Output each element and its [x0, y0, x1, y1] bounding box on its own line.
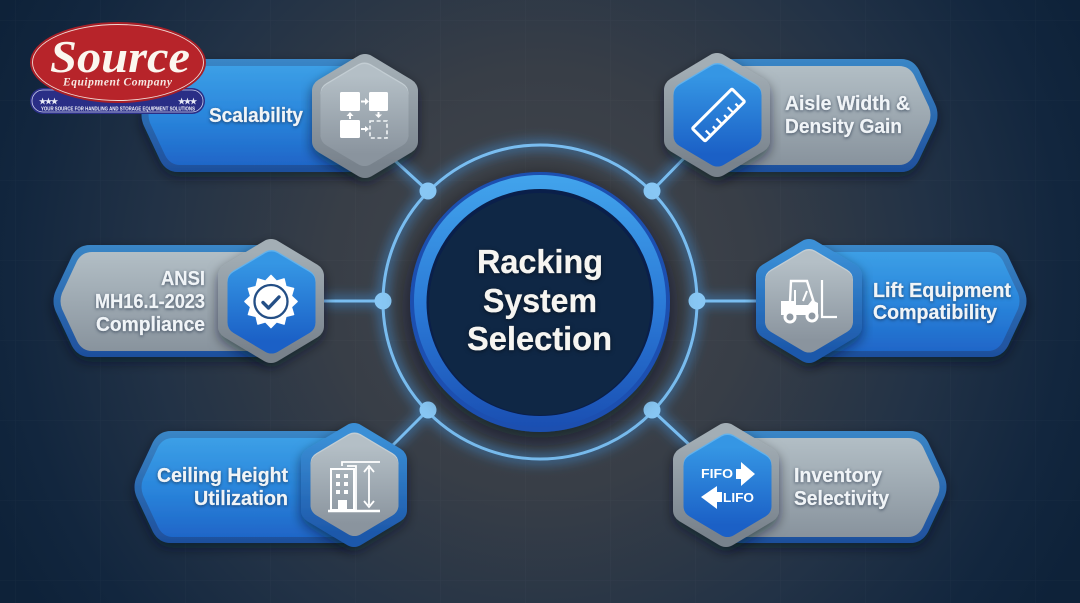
icon: fifo lifo arrows [701, 462, 755, 509]
pill [810, 245, 1026, 357]
icon: ruler [692, 89, 745, 141]
label: MH16.1-2023 [95, 291, 205, 313]
title: Racking [477, 243, 603, 280]
banner: ★★★ [178, 97, 198, 106]
label [785, 93, 910, 138]
hexagon [314, 436, 394, 534]
label: Density Gain [785, 116, 902, 138]
hexagon [677, 66, 757, 164]
oval: Equipment Company [62, 76, 173, 88]
pill [730, 431, 946, 543]
label: Ceiling Height [157, 465, 288, 487]
label: ANSI [161, 268, 205, 290]
label: Utilization [194, 488, 288, 510]
icon: compliance badge [245, 276, 297, 328]
panel: ceiling height [134, 431, 394, 543]
icon: flow squares [340, 92, 388, 138]
icon: fifo lifo arrows: LIFO [723, 490, 754, 505]
label [157, 465, 288, 510]
label: Lift Equipment [873, 280, 1011, 302]
icon: fifo lifo arrows: FIFO [701, 466, 733, 481]
label [873, 280, 1011, 324]
title: Selection [467, 320, 612, 357]
label: Scalability [209, 105, 304, 127]
panel: scalability [142, 59, 405, 172]
panel: ansi compliance [54, 245, 311, 357]
banner: YOUR SOURCE FOR HANDLING AND STORAGE EQUIPMENT SOLUTIONS [41, 106, 195, 112]
label: Selectivity [794, 488, 890, 510]
panel: lift equipment [769, 245, 1026, 357]
pill [134, 431, 350, 543]
title [467, 243, 612, 357]
title: System [483, 282, 597, 319]
pill [142, 59, 360, 172]
label [794, 465, 890, 510]
oval: Source [50, 31, 190, 82]
logo [30, 22, 206, 114]
label: Aisle Width & [785, 93, 910, 115]
panel: inventory selectivity [686, 431, 946, 543]
hexagon [686, 436, 766, 534]
pill [720, 59, 938, 172]
panel: aisle width [677, 59, 938, 172]
hexagon [325, 67, 405, 165]
banner: ★★★ [39, 97, 59, 106]
icon: building with height arrow [328, 462, 380, 511]
central hub [410, 172, 670, 432]
oval [30, 22, 206, 103]
pill [54, 245, 270, 357]
connector network [324, 145, 756, 459]
hexagon [769, 252, 849, 350]
label [95, 268, 205, 336]
label: Compliance [96, 314, 205, 336]
banner [30, 88, 205, 114]
label: Compatibility [873, 302, 998, 324]
icon: forklift [781, 280, 837, 322]
label: Inventory [794, 465, 883, 487]
hexagon [231, 252, 311, 350]
